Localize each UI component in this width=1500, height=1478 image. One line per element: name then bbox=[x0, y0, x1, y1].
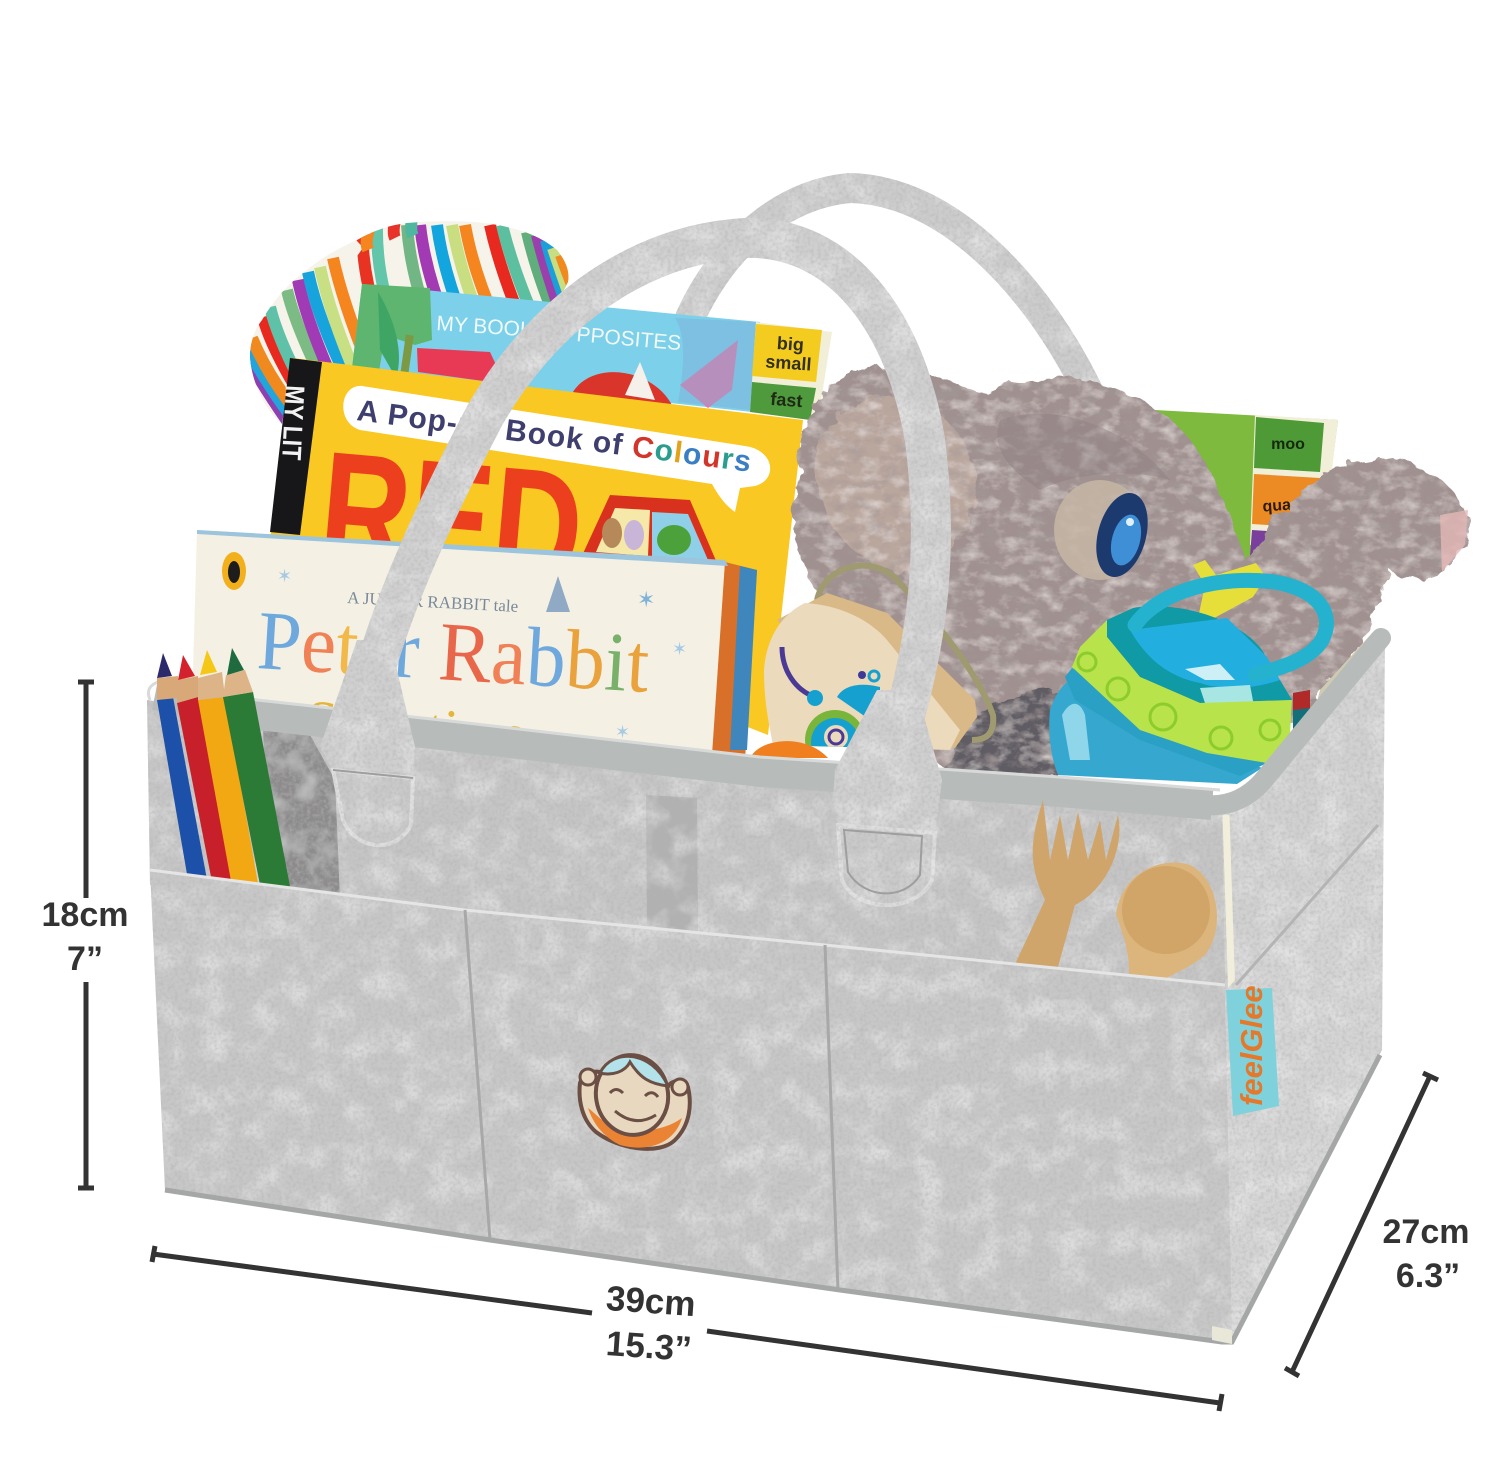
interior lining bbox=[1310, 632, 1373, 730]
crocheted striped ball bbox=[244, 216, 578, 428]
lid dome bbox=[1107, 606, 1292, 703]
index tabs bbox=[750, 322, 832, 420]
book: A Pop-up Book of Colours, RED: A Pop-up Book of Colours bbox=[355, 394, 754, 479]
handle loop left bbox=[333, 770, 413, 845]
side rim bbox=[1205, 638, 1381, 805]
feelGlee fabric tag: feelGlee bbox=[1234, 985, 1269, 1106]
index tabs: big bbox=[776, 333, 805, 355]
handle loop right bbox=[838, 825, 935, 905]
caddy front pockets bbox=[150, 870, 1380, 1344]
feelGlee fabric tag bbox=[1226, 985, 1279, 1116]
dark fold behind pencils bbox=[263, 728, 340, 900]
coloured pencils bbox=[157, 648, 292, 897]
width dimension: 39cm bbox=[605, 1279, 697, 1324]
peter rabbit book: ✶ bbox=[615, 722, 630, 742]
divider strap bbox=[646, 795, 698, 935]
zipper rim bbox=[155, 695, 1212, 805]
height dimension: 18cm bbox=[42, 896, 128, 934]
peter rabbit book: ✶ bbox=[277, 566, 292, 586]
height dimension bbox=[42, 682, 128, 1188]
peter rabbit book: Storytime bbox=[304, 689, 529, 766]
index tabs: fast bbox=[770, 389, 803, 411]
plush elephant bbox=[794, 367, 1468, 778]
peter rabbit book: ✶ bbox=[637, 587, 655, 612]
brand logo bbox=[580, 1049, 690, 1149]
depth dimension bbox=[1285, 1073, 1469, 1376]
peter rabbit book: ✶ bbox=[672, 639, 687, 659]
book title text: MY BOOK bbox=[436, 312, 535, 342]
caddy side wall bbox=[1205, 630, 1385, 1340]
car illustration bbox=[580, 495, 720, 570]
depth dimension: 6.3” bbox=[1396, 1257, 1460, 1295]
wooden toy bbox=[750, 566, 993, 770]
width dimension: 15.3” bbox=[605, 1324, 693, 1369]
cup handle ring bbox=[1135, 580, 1327, 675]
lime band bbox=[1072, 620, 1292, 763]
depth dimension: 27cm bbox=[1383, 1213, 1469, 1251]
index tabs: small bbox=[765, 351, 812, 375]
bamboo fork bbox=[1010, 800, 1119, 978]
green animal-sounds book: quack bbox=[1262, 495, 1309, 516]
subtitle text: A JUNIOR RABBIT tale bbox=[347, 588, 519, 616]
yellow spout bbox=[1193, 560, 1266, 623]
width dimension bbox=[152, 1246, 1222, 1411]
peter rabbit book bbox=[192, 530, 757, 766]
back handle bbox=[690, 188, 1090, 395]
book: A Pop-up Book of Colours, RED bbox=[270, 358, 803, 735]
speech bubble title bbox=[343, 386, 770, 512]
board book: My Book of Opposites: PPOSITES bbox=[576, 323, 682, 355]
handle end right bbox=[833, 690, 942, 833]
front handle bbox=[320, 238, 942, 905]
caddy back wall bbox=[147, 682, 1232, 1000]
board book: My Book of Opposites bbox=[352, 284, 832, 420]
green animal-sounds book bbox=[1155, 410, 1338, 560]
RED lettering: RED bbox=[313, 417, 590, 623]
green animal-sounds book: moo bbox=[1271, 436, 1305, 453]
side pocket bbox=[1222, 825, 1380, 1340]
spouted sippy cup bbox=[1049, 560, 1327, 784]
glittery eye bbox=[1088, 487, 1156, 583]
book: A Pop-up Book of Colours, RED: MY LIT bbox=[276, 385, 310, 462]
height dimension: 7” bbox=[67, 940, 103, 978]
handle end left bbox=[320, 640, 415, 773]
cup body bbox=[1049, 680, 1262, 784]
bamboo spoon bbox=[1116, 862, 1217, 985]
book title Peter Rabbit: Peter Rabbit bbox=[255, 594, 652, 711]
